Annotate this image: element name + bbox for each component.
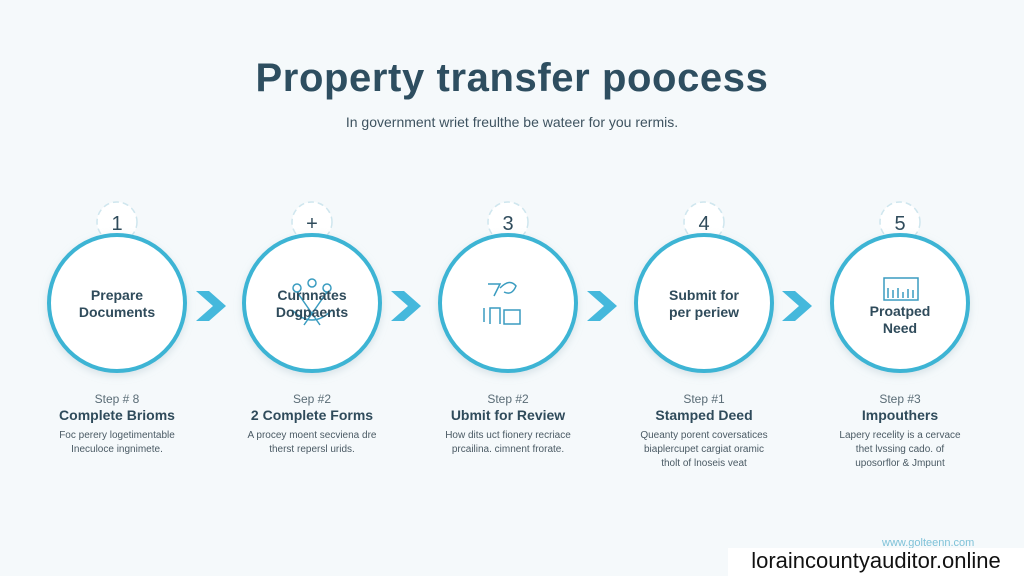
text: prcailina. cimnent frorate. xyxy=(452,444,564,455)
step 3 circle xyxy=(440,202,576,371)
text: Impouthers xyxy=(862,407,938,423)
text: therst repersl urids. xyxy=(269,444,355,455)
step 1 circle xyxy=(49,202,185,371)
step 4 circle: 4 xyxy=(698,213,710,235)
text: Ineculoce ingnimete. xyxy=(71,444,163,455)
arrow 2 xyxy=(391,291,421,321)
text: Step #1 xyxy=(683,392,725,406)
text: uposorflor & Jmpunt xyxy=(855,458,945,469)
circle text 5: Proatped xyxy=(870,303,930,319)
step 2 circle: + xyxy=(306,213,318,235)
text: Step #2 xyxy=(487,392,529,406)
text: thet lvssing cado. of xyxy=(856,444,944,455)
arrow 3 xyxy=(587,291,617,321)
text: Lapery recelity is a cervace xyxy=(839,430,961,441)
text: A procey moent secviena dre xyxy=(248,430,376,441)
circle text 2: Dogpaents xyxy=(276,304,348,320)
step 1 text xyxy=(59,392,175,455)
circle text 2: Curnnates xyxy=(277,287,347,303)
step 5 text xyxy=(839,392,961,469)
step 5 circle xyxy=(832,202,968,371)
step 2 circle xyxy=(244,202,380,371)
circle text 1 xyxy=(79,287,155,320)
text: Sep #2 xyxy=(293,392,331,406)
text: How dits uct fionery recriace xyxy=(445,430,571,441)
step 4 text xyxy=(640,392,768,469)
circle text 5 xyxy=(870,303,930,336)
circle text 4 xyxy=(669,287,739,320)
circle text 4: per periew xyxy=(669,304,739,320)
circle text 1: Documents xyxy=(79,304,155,320)
text: Stamped Deed xyxy=(655,407,753,423)
text: Foc perery logetimentable xyxy=(59,430,175,441)
circle text 1: Prepare xyxy=(91,287,143,303)
step 1 circle: 1 xyxy=(111,213,123,235)
arrow 1 xyxy=(196,291,226,321)
text: Queanty porent coversatices xyxy=(640,430,768,441)
arrow 4 xyxy=(782,291,812,321)
step 3 text xyxy=(445,392,571,455)
step 3 circle: 3 xyxy=(502,213,514,235)
circle text 5: Need xyxy=(883,320,917,336)
watermark: loraincountyauditor.online xyxy=(751,548,1001,573)
title: Property transfer poocess xyxy=(256,56,768,100)
subtitle: In government wriet freulthe be wateer for you rermis. xyxy=(346,114,678,130)
text: biaplercupet cargiat oramic xyxy=(644,444,764,455)
circle text 2 xyxy=(276,287,348,320)
circle text 4: Submit for xyxy=(669,287,739,303)
footer url: www.golteenn.com xyxy=(882,537,974,549)
text: Ubmit for Review xyxy=(451,407,565,423)
step 4 circle xyxy=(636,202,772,371)
text: Step # 8 xyxy=(95,392,139,406)
text: Complete Brioms xyxy=(59,407,175,423)
text: tholt of lnoseis veat xyxy=(661,458,747,469)
step 5 circle: 5 xyxy=(894,213,906,235)
text: Step #3 xyxy=(879,392,921,406)
step 2 text xyxy=(248,392,376,455)
text: 2 Complete Forms xyxy=(251,407,373,423)
